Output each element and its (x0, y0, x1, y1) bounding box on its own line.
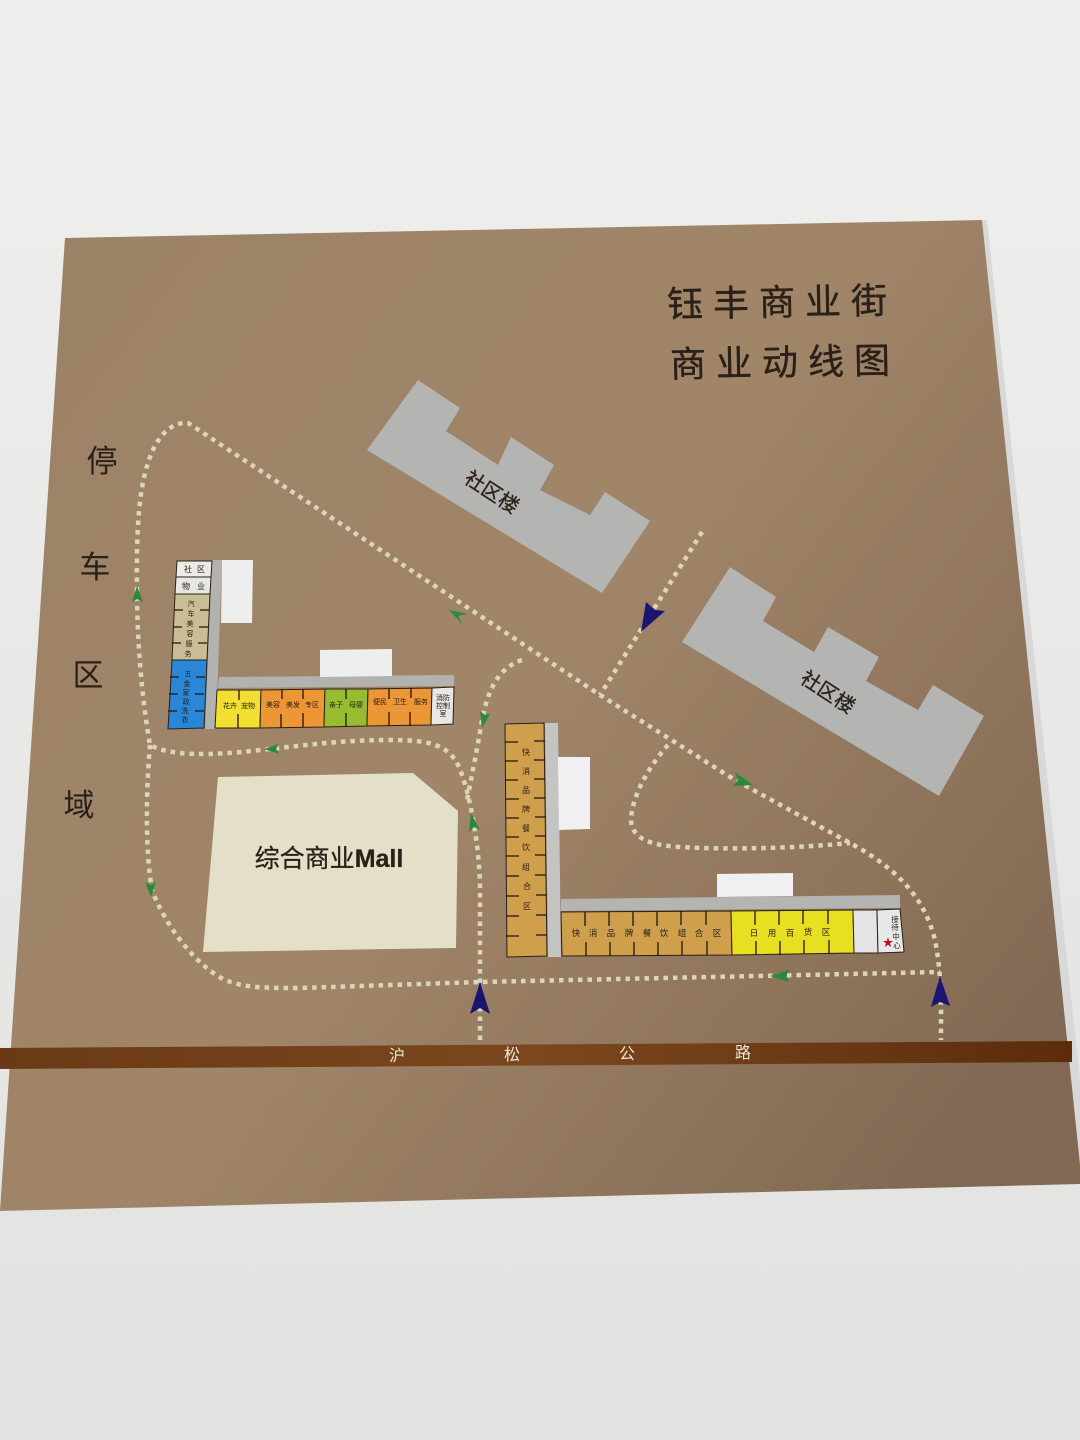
block: southeast horizontal shops: 货 (804, 927, 813, 937)
block: west horizontal shops: 便民 (373, 697, 387, 706)
label: parking area: 车 (80, 550, 110, 585)
block: west horizontal shops: 服务 (414, 697, 428, 706)
block: southeast horizontal shops: 饮 (660, 928, 669, 938)
circulation dotted routes (137, 423, 941, 1040)
block: west horizontal shops: 室 (440, 709, 446, 718)
label: parking area: 域 (64, 788, 94, 823)
block: west vertical shops: 家 (182, 688, 190, 697)
block: central vertical shops: 饮 (522, 842, 530, 852)
block: west vertical shops: 社 (184, 564, 192, 574)
block: central vertical shops (505, 723, 590, 957)
block: central vertical shops: 消 (522, 766, 530, 776)
block: central vertical shops: 合 (523, 881, 531, 891)
block: west vertical shops: 区 (197, 565, 205, 574)
block: west vertical shops: 服 (186, 640, 192, 648)
block: southeast horizontal shops: 区 (822, 927, 831, 937)
building: mall (203, 773, 458, 952)
block: southeast horizontal shops: 快 (572, 928, 581, 938)
title: 钰丰商业街 (667, 280, 897, 325)
block: southeast horizontal shops (561, 873, 904, 956)
label: parking area (64, 444, 118, 823)
block: west vertical shops: 衣 (182, 715, 188, 724)
block: west vertical shops: 车 (188, 609, 194, 618)
block: southeast horizontal shops: 餐 (643, 928, 652, 938)
block: central vertical shops: 区 (523, 902, 531, 911)
building: community east (682, 567, 984, 796)
road: Husong highway (0, 1041, 1072, 1069)
block: central vertical shops: 牌 (522, 804, 530, 814)
block: southeast horizontal shops: 品 (607, 928, 615, 938)
road: Husong highway: 公 (619, 1046, 635, 1063)
block: west horizontal shops: 美发 (286, 700, 300, 709)
block: west vertical shops: 容 (186, 629, 194, 638)
road: Husong highway: 路 (735, 1044, 751, 1062)
road: Husong highway: 沪 (389, 1047, 405, 1065)
block: west vertical shops: 汽 (188, 599, 194, 608)
block: southeast horizontal shops: 用 (768, 928, 776, 938)
block: west vertical shops: 洗 (182, 706, 188, 715)
block: west vertical shops (168, 560, 253, 729)
block: west horizontal shops: 控制 (436, 701, 450, 710)
block: central vertical shops: 组 (522, 862, 530, 872)
block: west horizontal shops: 美容 (266, 700, 280, 709)
block: west horizontal shops: 卫生 (393, 697, 407, 706)
block: west vertical shops: 物 (182, 581, 190, 591)
block: west horizontal shops: 消防 (436, 693, 450, 702)
block: southeast horizontal shops: 中 (892, 931, 900, 941)
block: southeast horizontal shops: 接 (891, 914, 899, 924)
block: west vertical shops: 金 (184, 679, 190, 688)
block: southeast horizontal shops: 心 (893, 941, 901, 950)
label: parking area: 区 (72, 658, 104, 693)
block: west horizontal shops: 宠物 (241, 701, 255, 710)
block: southeast horizontal shops: 日 (750, 928, 758, 938)
building: community east: 社区楼 (796, 667, 859, 719)
title (667, 280, 900, 385)
label: parking area: 停 (86, 444, 118, 479)
block: west vertical shops: 政 (182, 697, 190, 706)
building: community north: 社区楼 (460, 467, 523, 519)
arrows: navy entrance markers (470, 602, 950, 1014)
block: west horizontal shops (215, 649, 454, 728)
block: southeast horizontal shops: 合 (695, 928, 704, 938)
building: mall: 综合商业Mall (255, 845, 403, 873)
block: west horizontal shops: 专区 (305, 700, 319, 709)
block: central vertical shops: 快 (522, 747, 530, 757)
block: central vertical shops: 餐 (522, 824, 530, 833)
block: southeast horizontal shops: 组 (678, 928, 687, 938)
title: 商业动线图 (670, 340, 900, 385)
block: west vertical shops: 五 (184, 670, 192, 678)
block: west vertical shops: 务 (184, 649, 192, 658)
block: southeast horizontal shops: 牌 (625, 928, 634, 938)
block: west vertical shops: 美 (186, 619, 194, 628)
block: west horizontal shops: 母婴 (349, 701, 363, 709)
block: southeast horizontal shops: 待 (891, 922, 899, 932)
block: southeast horizontal shops: 区 (713, 928, 722, 938)
block: southeast horizontal shops: 百 (786, 928, 794, 938)
arrows: green direction markers (132, 586, 789, 982)
block: central vertical shops: 品 (522, 786, 530, 795)
block: west vertical shops: 业 (197, 581, 205, 591)
block: west horizontal shops: 花卉 (223, 701, 237, 710)
road: Husong highway: 松 (504, 1046, 520, 1064)
block: west horizontal shops: 亲子 (329, 700, 343, 709)
building: community north (367, 380, 650, 593)
icon: red star: ★ (882, 937, 894, 949)
block: southeast horizontal shops: 消 (589, 928, 597, 938)
panel: map board (0, 220, 1080, 1211)
